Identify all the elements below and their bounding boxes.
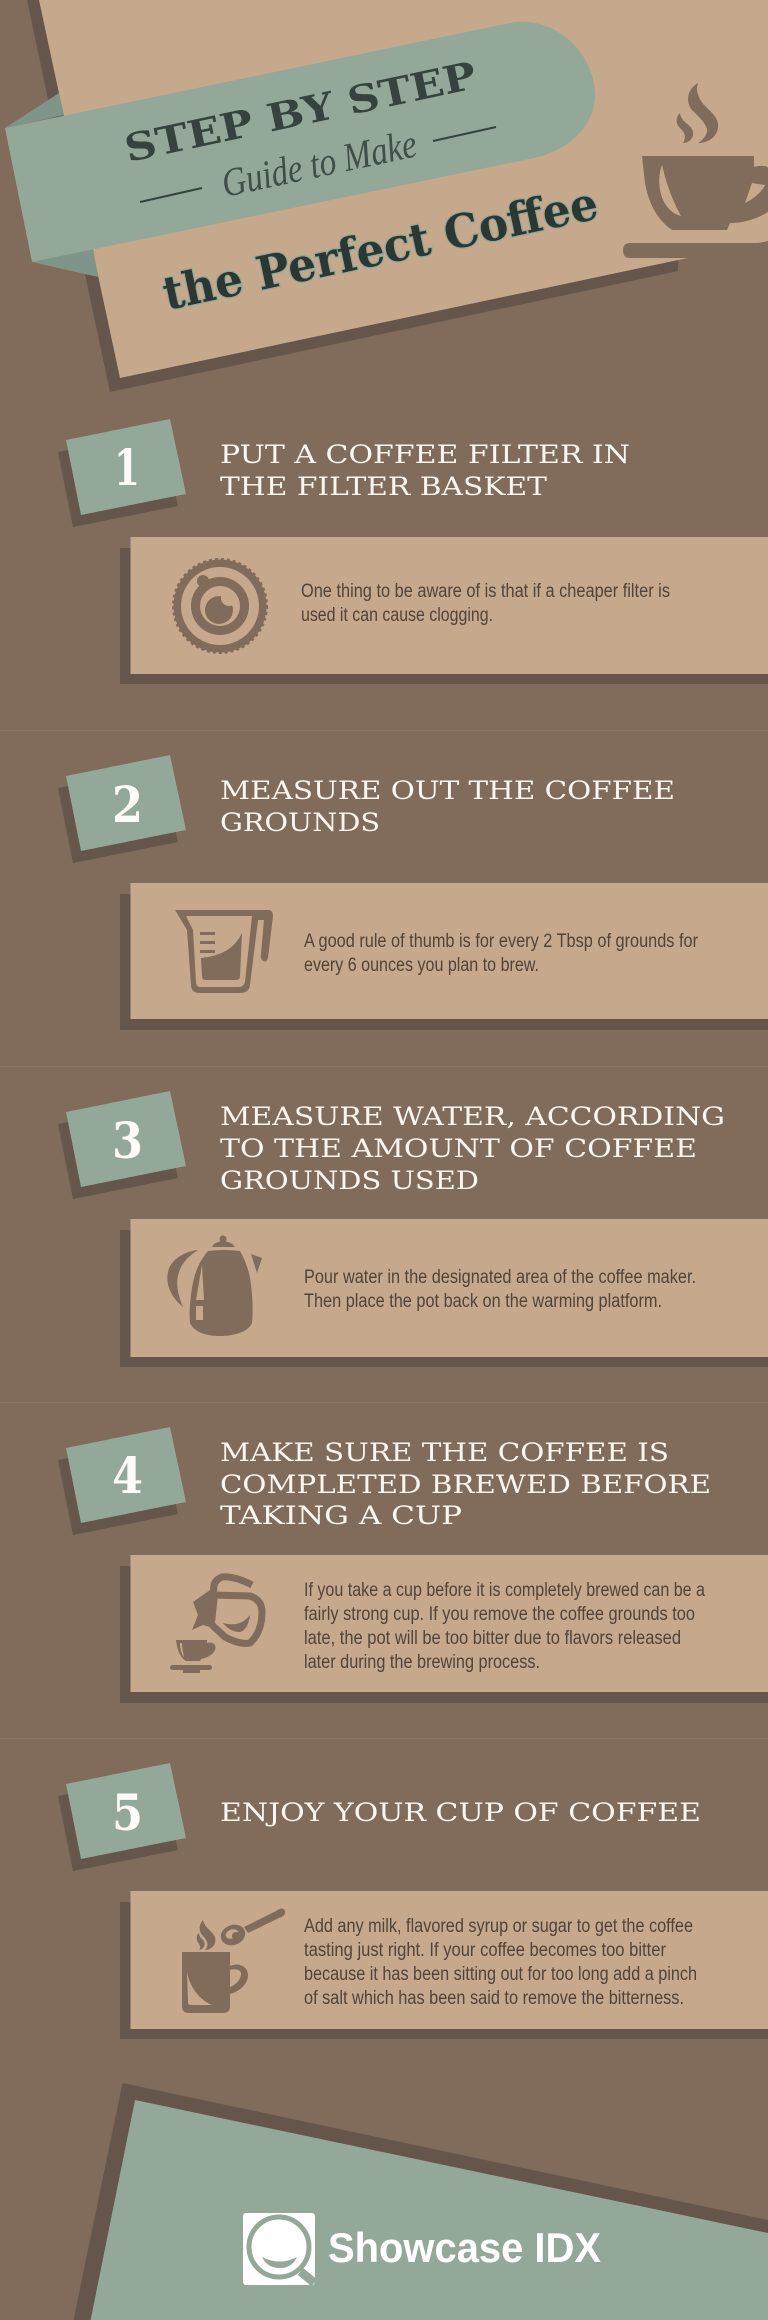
card 5 text: because it has been sitting out for too long add a pinch [304,1964,697,1985]
card 1 text: used it can cause clogging. [301,605,493,626]
icon: mug with spoon [182,1908,285,2013]
heading: step by step: STEP BY STEP [121,52,480,171]
card 1 text: One thing to be aware of is that if a cheaper filter is [301,581,670,602]
step 4 [58,1427,768,1703]
card 5 [120,1891,768,2039]
badge 1 [58,419,186,527]
card 2 text: every 6 ounces you plan to brew. [304,955,539,976]
step 3 title: GROUNDS USED [220,1166,479,1195]
card 5 text [304,1916,697,2009]
badge 4 [58,1427,186,1535]
step 5 title: ENJOY YOUR CUP OF COFFEE [220,1798,701,1827]
step 1 title: THE FILTER BASKET [220,472,547,501]
badge 5: 5 [112,1783,143,1842]
header paper shadow [27,0,680,392]
card 3 [120,1219,768,1367]
card 5 text: tasting just right. If your coffee becomes too bitter [304,1940,667,1961]
ribbon [5,22,595,262]
step 4 title [220,1438,711,1530]
badge 2 [58,755,186,863]
step 3 title [220,1102,725,1195]
logo mark [243,2213,318,2286]
card 4 text [304,1580,705,1673]
step 3 title: MEASURE WATER, ACCORDING [220,1102,725,1131]
card 4 [120,1555,768,1703]
heading: the perfect coffee: the Perfect Coffee [158,176,603,321]
icon: coffee filter [173,559,267,653]
step 3 title: TO THE AMOUNT OF COFFEE [220,1134,697,1163]
card 1 [120,537,768,684]
card 4 text: late, the pot will be too bitter due to flavors released [304,1628,681,1649]
step 2 [58,755,768,1030]
header paper [39,0,768,378]
subheading rules [140,127,496,202]
card 2 [120,883,768,1030]
icon: coffee cup [623,83,768,258]
card 2 text: A good rule of thumb is for every 2 Tbsp of grounds for [304,931,699,952]
card 3 text: Then place the pot back on the warming platform. [304,1291,662,1312]
card 1 text [301,581,670,626]
ribbon top fold [5,93,64,128]
step 1 [58,419,768,684]
badge 3: 3 [112,1111,143,1170]
card 2 text [304,931,699,976]
badge 3 [58,1091,186,1199]
icon: coffee pot [167,1236,262,1336]
step 3 [58,1091,768,1367]
step 5 [58,1763,768,2039]
step 2 title: GROUNDS [220,808,380,837]
icon: measuring jug [175,910,273,993]
logo wordmark: Showcase IDX [328,2224,601,2271]
footer panel [74,2083,768,2320]
step 2 title [220,776,675,837]
icon: pot pouring into cup [170,1577,262,1673]
ribbon bottom fold [32,248,98,277]
step 4 title: TAKING A CUP [220,1501,462,1530]
step 2 title: MEASURE OUT THE COFFEE [220,776,675,805]
card 3 text: Pour water in the designated area of the coffee maker. [304,1267,696,1288]
step 1 title [220,440,630,501]
logo: showcase idx [243,2213,601,2286]
step 4 title: MAKE SURE THE COFFEE IS [220,1438,669,1467]
card 4 text: If you take a cup before it is completely brewed can be a [304,1580,705,1601]
badge 1: 1 [114,438,140,497]
badge 4: 4 [112,1446,143,1505]
card 4 text: later during the brewing process. [304,1652,540,1673]
badge 2: 2 [112,775,143,834]
badge 5 [58,1763,186,1871]
card 4 text: fairly strong cup. If you remove the coffee grounds too [304,1604,695,1625]
card 5 text: of salt which has been said to remove the bitterness. [304,1988,684,2009]
card 5 text: Add any milk, flavored syrup or sugar to get the coffee [304,1916,693,1937]
step 4 title: COMPLETED BREWED BEFORE [220,1470,711,1499]
card 3 text [304,1267,696,1312]
step 1 title: PUT A COFFEE FILTER IN [220,440,630,469]
header banner [5,0,768,392]
subheading: guide to make: Guide to Make [218,121,421,206]
